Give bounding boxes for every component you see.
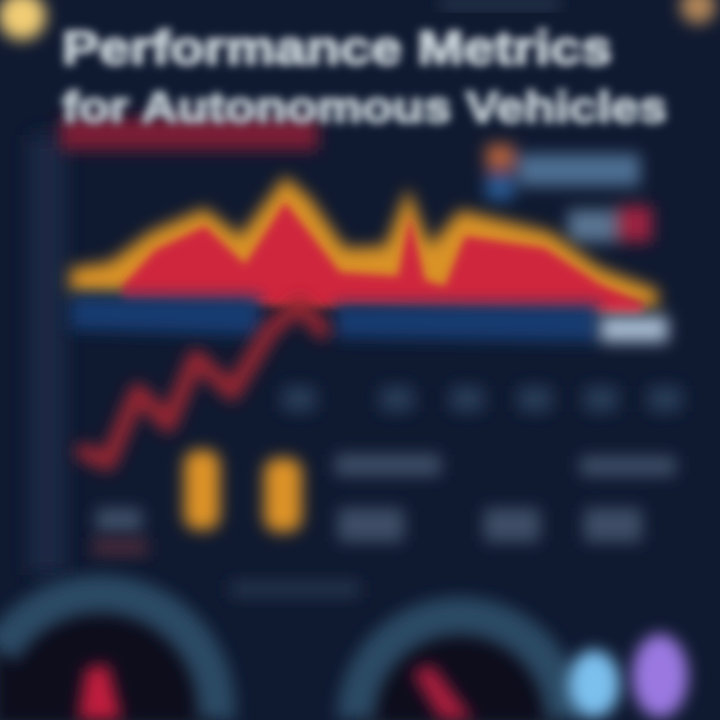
small caption	[92, 538, 148, 556]
light label right of band	[600, 316, 668, 342]
orange indicators	[184, 450, 302, 532]
chart: orange area	[70, 176, 658, 308]
title: Performance Metrics	[62, 21, 612, 74]
gauge: left	[0, 594, 216, 720]
icon: top right glow	[680, 0, 716, 24]
axis tick labels	[282, 386, 682, 412]
chart: blue band right	[335, 304, 600, 342]
title: for Autonomous Vehicles	[62, 83, 667, 132]
top faint labels	[440, 0, 560, 8]
legend	[486, 144, 652, 242]
title	[62, 21, 667, 132]
subtitle bar	[60, 118, 318, 150]
chart: blue band left	[70, 296, 262, 336]
chart: red area	[122, 202, 645, 314]
metric labels	[96, 454, 676, 542]
lower caption	[230, 580, 360, 598]
icon: blue orb	[568, 650, 620, 718]
gauge: right	[356, 616, 564, 720]
left axis band	[30, 135, 64, 575]
icon: purple orb	[632, 634, 688, 718]
icon: top left glow	[0, 0, 46, 40]
chart: red trend line	[84, 304, 322, 462]
